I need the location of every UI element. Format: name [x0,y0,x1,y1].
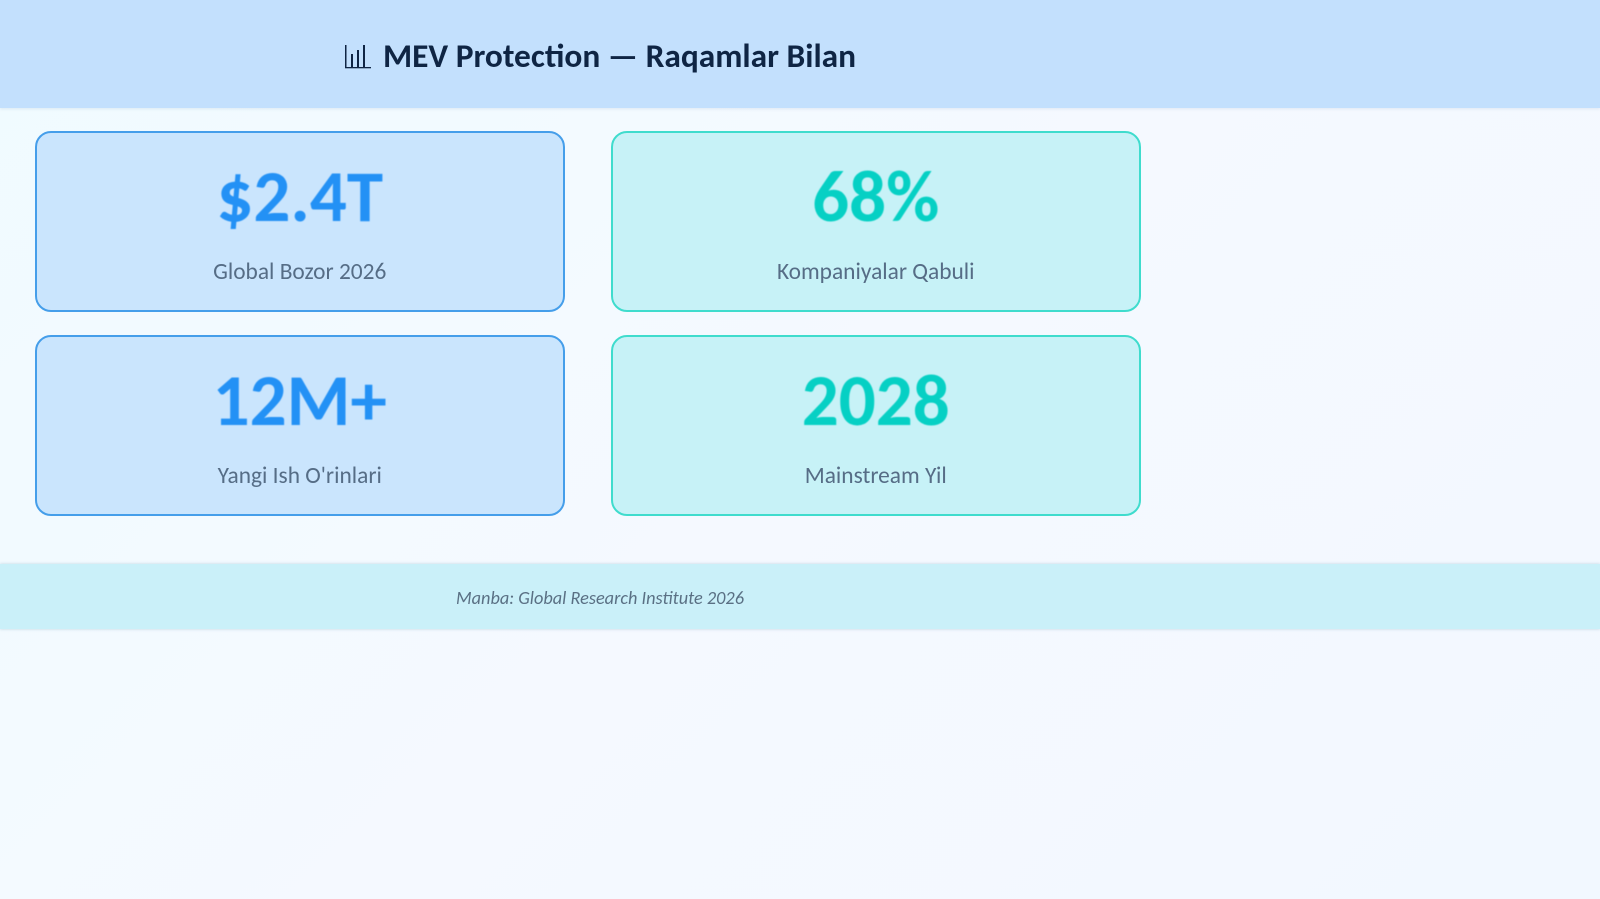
label: Global Bozor 2026 [213,258,386,286]
value: 2028 [802,355,950,445]
stat card: mainstream year [611,335,1140,516]
stat card: company adoption [611,131,1140,312]
value: $2.4T [216,151,383,241]
stat card: new jobs [35,335,564,516]
stat card: global market [35,131,564,312]
header band [0,0,1600,108]
icon: bar chart [345,45,371,68]
source note: Manba: Global Research Institute 2026 [456,587,744,609]
title with chart icon: MEV Protection — Raqamlar Bilan [383,35,856,76]
label: Mainstream Yil [805,462,947,490]
value: 12M+ [213,355,387,445]
label: Kompaniyalar Qabuli [777,258,975,286]
label: Yangi Ish O'rinlari [218,462,382,490]
footer band [0,564,1600,629]
value: 68% [812,151,939,241]
